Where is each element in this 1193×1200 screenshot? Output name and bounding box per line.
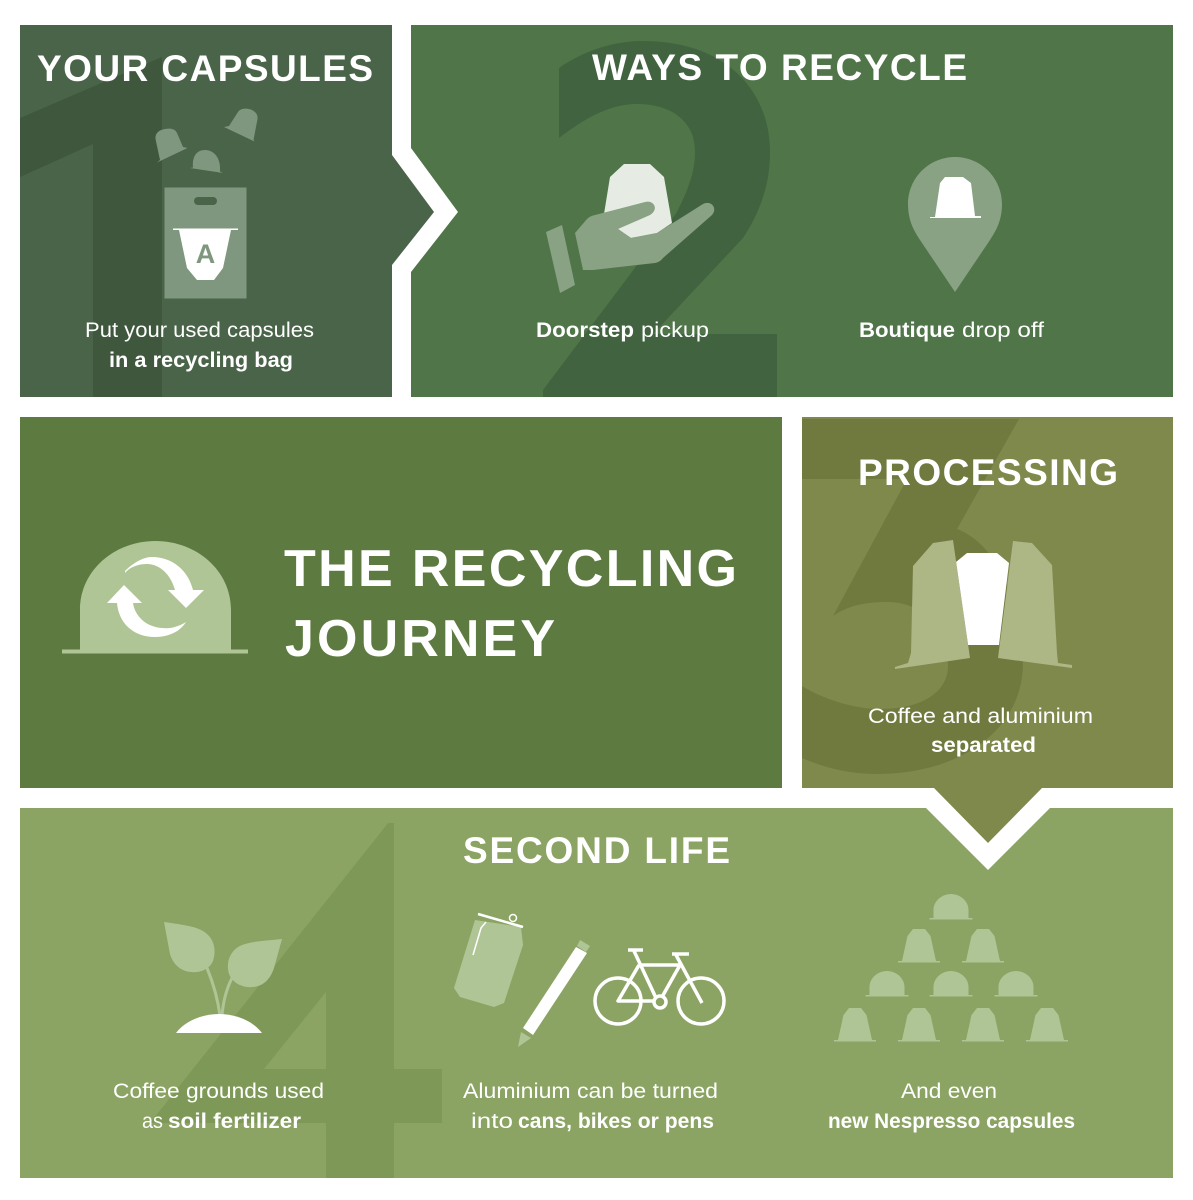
text: coffee and aluminium separated — [868, 705, 1093, 757]
panel: your capsules — [20, 25, 434, 397]
title text: JOURNEY — [285, 610, 555, 668]
icon: recycling bag: A — [196, 239, 215, 269]
text: coffee and aluminium separated: separated — [931, 734, 1036, 757]
text: put capsules in bag: in a recycling bag — [109, 349, 293, 372]
panel: second life — [20, 808, 1173, 1178]
icon: sprouting plant — [164, 922, 282, 1033]
text: boutique drop off — [859, 319, 1044, 342]
text: doorstep pickup: Doorstep — [536, 319, 634, 342]
text: new capsules: new Nespresso capsules — [828, 1110, 1075, 1133]
text: soil fertilizer: as — [142, 1110, 163, 1133]
heading: second life: SECOND LIFE — [463, 830, 730, 871]
text: cans bikes or pens: into — [471, 1110, 513, 1133]
text: put capsules in bag: Put your used capsules — [85, 319, 314, 342]
text: doorstep pickup — [536, 319, 709, 342]
text: doorstep pickup: pickup — [641, 319, 709, 342]
panel: processing — [802, 417, 1173, 843]
text: soil fertilizer: soil fertilizer — [168, 1110, 301, 1133]
text: soil fertilizer: Coffee grounds used — [113, 1080, 324, 1103]
icon: pen — [518, 940, 590, 1047]
icon: falling capsules — [155, 109, 258, 173]
text: boutique drop off: drop off — [962, 319, 1044, 342]
text: coffee and aluminium separated: Coffee and aluminium — [868, 705, 1093, 728]
text: cans bikes or pens — [463, 1080, 718, 1133]
title text — [284, 540, 737, 668]
title text: THE RECYCLING — [284, 540, 737, 598]
heading: ways to recycle: WAYS TO RECYCLE — [592, 47, 967, 88]
heading: processing: PROCESSING — [858, 452, 1118, 493]
text: new capsules: And even — [901, 1080, 997, 1103]
icon: aluminium can — [454, 914, 523, 1007]
text: cans bikes or pens: Aluminium can be turned — [463, 1080, 718, 1103]
icon: map pin with capsule — [908, 157, 1002, 292]
icon: recycling bag — [164, 188, 246, 298]
icon: separated capsule — [895, 540, 1072, 669]
text: put capsules in bag — [85, 319, 314, 372]
number 4 watermark — [150, 823, 442, 1178]
number 3 watermark — [802, 419, 1023, 774]
panel: ways to recycle — [411, 25, 1173, 397]
text: new capsules — [828, 1080, 1075, 1133]
icon: capsule with recycling arrows — [62, 541, 248, 654]
icon: capsule pyramid — [834, 894, 1068, 1042]
text: cans bikes or pens: cans, bikes or pens — [518, 1110, 714, 1133]
panel: title — [20, 417, 782, 788]
icon: hand holding capsule — [546, 164, 714, 293]
number 1 watermark — [20, 57, 162, 397]
heading: your capsules: YOUR CAPSULES — [37, 48, 373, 89]
number 2 watermark — [543, 41, 777, 397]
text: boutique drop off: Boutique — [859, 319, 955, 342]
icon: bicycle — [595, 950, 724, 1024]
text: soil fertilizer — [113, 1080, 324, 1133]
